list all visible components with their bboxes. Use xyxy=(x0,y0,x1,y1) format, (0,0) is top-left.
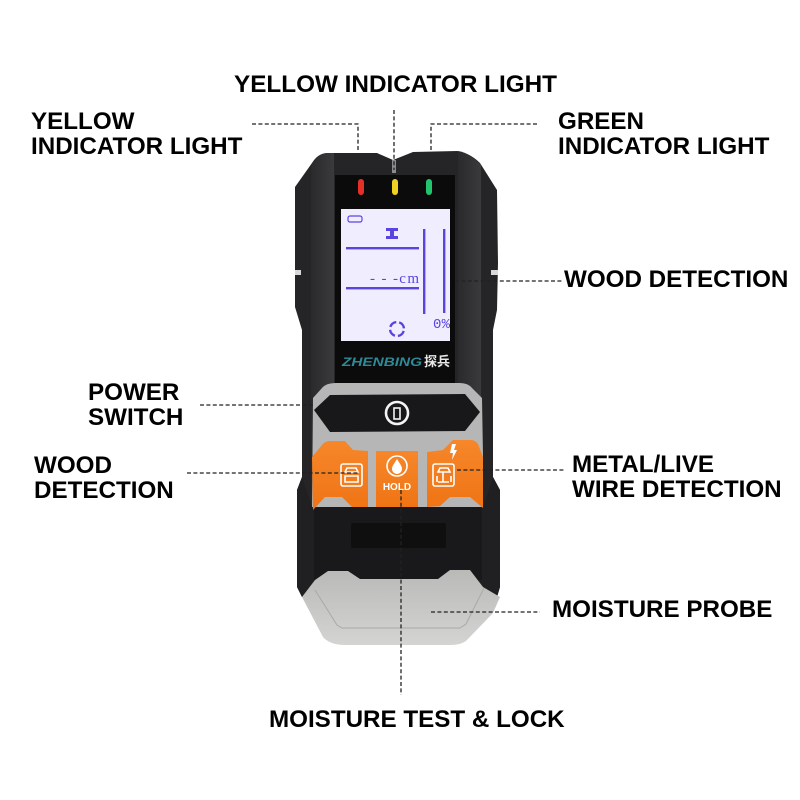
label: green indicator light: GREEN xyxy=(558,108,644,135)
label: moisture probe: MOISTURE PROBE xyxy=(552,596,772,623)
label: power switch: SWITCH xyxy=(88,404,183,431)
center notch highlight xyxy=(392,160,396,173)
lcd screen xyxy=(341,209,451,341)
orange button: hold xyxy=(376,451,418,507)
label: left yellow indicator light: INDICATOR LIGHT xyxy=(31,133,243,160)
label: power switch: POWER xyxy=(88,379,179,406)
label: metal and live wire detection: WIRE DETECTION xyxy=(572,476,782,503)
reading: - - -cm xyxy=(370,271,419,287)
device body xyxy=(295,151,500,597)
lower black section xyxy=(297,477,500,597)
label: top yellow indicator light: YELLOW INDICATOR LIGHT xyxy=(234,71,557,98)
metal icon xyxy=(433,464,454,486)
brand logo: 探兵 xyxy=(424,354,450,369)
leader lines xyxy=(187,110,565,695)
power icon xyxy=(386,402,408,424)
label: green indicator light: INDICATOR LIGHT xyxy=(558,133,770,160)
led: yellow xyxy=(392,179,398,195)
label: wood detection (right): WOOD DETECTION xyxy=(564,266,788,293)
brand logo xyxy=(341,354,450,369)
label: left yellow indicator light: YELLOW xyxy=(31,108,135,135)
front black panel xyxy=(335,175,455,385)
battery icon xyxy=(348,216,362,222)
led: green xyxy=(426,179,432,195)
raised label recess xyxy=(351,523,446,548)
side notches xyxy=(295,270,498,275)
lightning icon xyxy=(450,444,457,460)
percent reading: 0% xyxy=(433,317,451,333)
moisture probe cap xyxy=(302,570,500,645)
orange button: wood xyxy=(312,441,368,510)
label: moisture test and lock: MOISTURE TEST & LOCK xyxy=(269,706,565,733)
power switch plate xyxy=(314,394,480,432)
hold label: HOLD xyxy=(383,482,411,493)
label: wood detection (left): DETECTION xyxy=(34,477,174,504)
side panels xyxy=(311,151,481,590)
device xyxy=(295,151,500,645)
orange button: metal / live wire xyxy=(427,440,483,508)
brand logo: ZHENBING xyxy=(341,355,422,369)
label: metal and live wire detection: METAL/LIVE xyxy=(572,451,714,478)
led: red xyxy=(358,179,364,195)
moisture icon xyxy=(387,456,407,476)
probe inset line xyxy=(315,588,484,628)
label: wood detection (left): WOOD xyxy=(34,452,112,479)
target icon xyxy=(390,322,404,336)
gray control plate xyxy=(312,383,483,507)
wood icon xyxy=(341,464,362,486)
